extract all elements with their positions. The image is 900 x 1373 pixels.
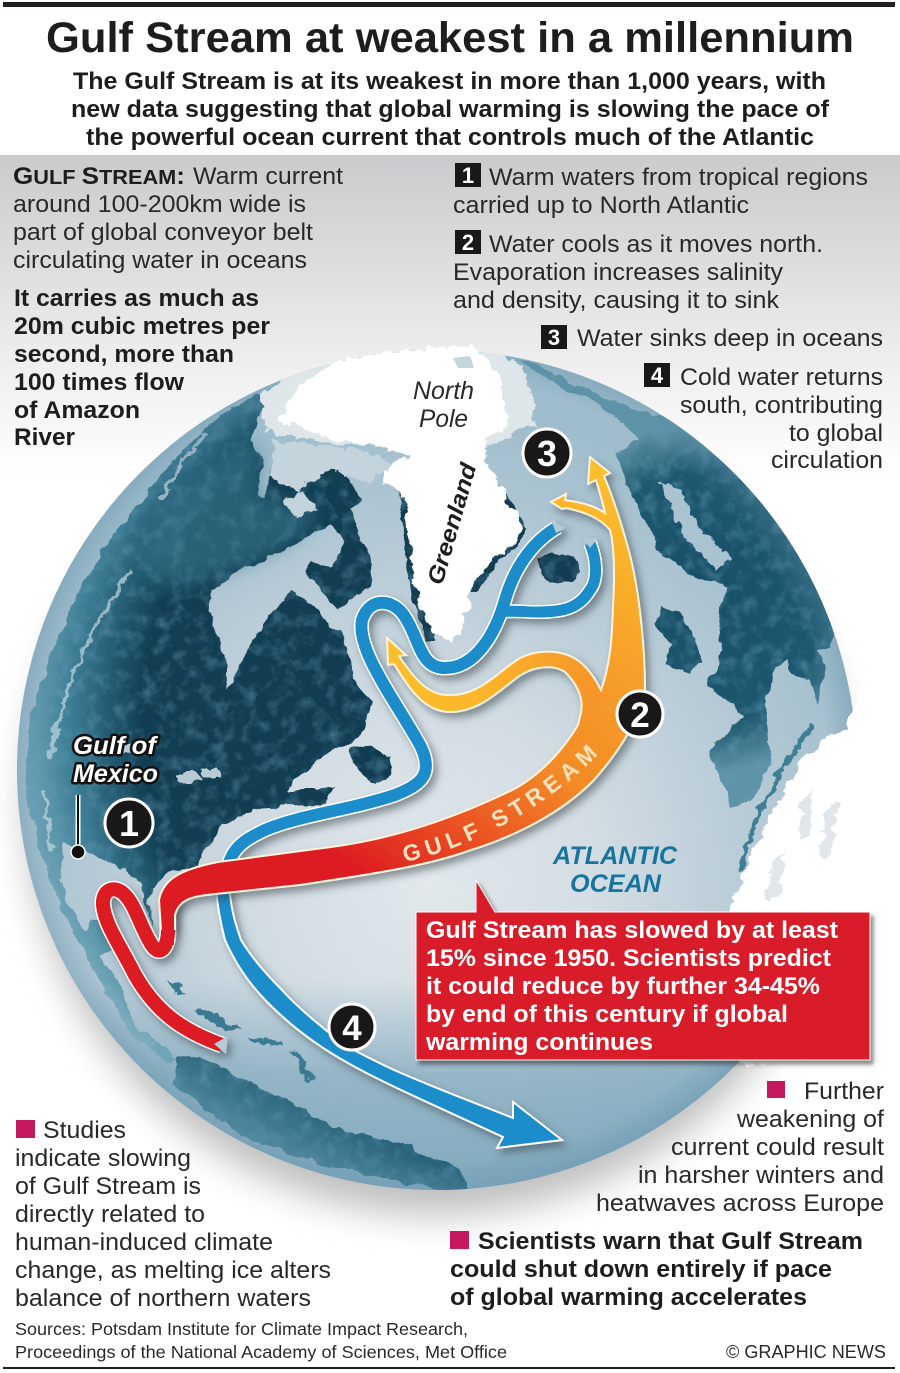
sources: Sources: Potsdam Institute for Climate Impact Research,: [15, 1319, 468, 1339]
badge 1: 1: [119, 803, 139, 844]
step 4: Cold water returns: [680, 364, 883, 391]
badge 3: 3: [537, 433, 557, 474]
pale sea ice halo: [262, 342, 534, 445]
text: flow comparison: It carries as much as: [14, 285, 259, 312]
land: northern Canada lighter tone: [140, 440, 315, 590]
text: further weakening: [596, 1078, 884, 1217]
badge 2: 2: [630, 696, 650, 735]
step 4: 4: [651, 363, 664, 388]
arctic ice and Greenland: [278, 346, 522, 643]
text: further weakening: in harsher winters and: [638, 1162, 884, 1189]
step 4: circulation: [771, 447, 883, 474]
label: Atlantic Ocean: OCEAN: [570, 870, 662, 898]
land: Arctic archipelago: [262, 458, 362, 548]
step 4: south, contributing: [680, 392, 883, 419]
Africa: north coast: [742, 725, 813, 872]
text: studies: directly related to: [15, 1201, 205, 1228]
subtitle: new data suggesting that global warming is slowing the pace of: [71, 96, 830, 123]
ocean: [17, 350, 857, 1190]
label: Greenland: Greenland: [422, 459, 482, 587]
step 4: [644, 363, 883, 474]
text: Gulf Stream definition: part of global conveyor belt: [13, 219, 313, 246]
step 2: Water cools as it moves north.: [489, 231, 823, 258]
text: Gulf Stream definition: around 100-200km wide is: [13, 191, 306, 218]
land masses: [28, 356, 838, 1195]
text: flow comparison: 20m cubic metres per: [14, 313, 270, 340]
step 2: [453, 230, 823, 314]
text: Gulf Stream definition: GULF STREAM :: [13, 163, 185, 190]
bottom rule: [3, 1367, 895, 1369]
islands: Caribbean: [167, 980, 314, 1080]
text: studies: human-induced climate: [15, 1229, 273, 1256]
text: studies: balance of northern waters: [15, 1285, 311, 1312]
ocean: darker southern water: [17, 350, 857, 1190]
step 3: 3: [548, 325, 560, 350]
text: Gulf Stream definition: Warm current: [193, 163, 343, 190]
land: pale Rocky Mountain streak: [45, 435, 205, 850]
globe shadow: [27, 395, 847, 1215]
step 2: Evaporation increases salinity: [453, 259, 784, 286]
step 1: 1: [462, 163, 474, 188]
sheer white right edge of the globe: [858, 690, 900, 910]
land: Newfoundland: [348, 745, 392, 785]
credit: © GRAPHIC NEWS: [726, 1342, 886, 1362]
text: flow comparison: of Amazon: [14, 397, 140, 424]
land: Greenland west coast: [398, 490, 436, 640]
label: North Pole: Pole: [419, 405, 468, 433]
label: Atlantic Ocean: ATLANTIC: [552, 842, 678, 870]
panel: grey background: [0, 155, 900, 480]
step 1: Warm waters from tropical regions: [489, 164, 868, 191]
text: further weakening: heatwaves across Europe: [596, 1190, 884, 1217]
globe: [17, 342, 900, 1195]
badge 3: [523, 429, 571, 477]
text: studies: indicate slowing: [15, 1145, 191, 1172]
label: Gulf of Mexico: Mexico: [73, 760, 158, 788]
sea: patch in the ice: [453, 356, 474, 368]
label: Atlantic Ocean: [552, 842, 678, 898]
pin: Gulf of Mexico: [71, 795, 85, 859]
callout: slowdown: warming continues: [425, 1029, 653, 1056]
text: Gulf Stream definition: [13, 163, 343, 274]
callout: slowdown: by end of this century if global: [426, 1001, 788, 1028]
label: North Pole: North: [413, 377, 474, 405]
limb shading: [17, 350, 857, 1190]
sources: Proceedings of the National Academy of Sciences, Met Office: [15, 1342, 507, 1362]
callout: slowdown: [416, 880, 870, 1060]
label: Gulf of Mexico: Gulf of: [73, 732, 159, 760]
ocean currents: [94, 455, 656, 1158]
current: red tail through the Gulf of Mexico: [103, 885, 228, 1054]
ice: mottled Canadian Arctic: [272, 440, 395, 520]
text: shutdown warning: of global warming accelerates: [450, 1284, 807, 1311]
text: further weakening: current could result: [671, 1134, 884, 1161]
subtitle: the powerful ocean current that controls much of the Atlantic: [86, 124, 814, 151]
sources: [15, 1319, 507, 1362]
label: Gulf of Mexico: [73, 732, 159, 788]
text: shutdown warning: Scientists warn that Gulf Stream: [478, 1228, 863, 1255]
text: shutdown warning: could shut down entirely if pace: [450, 1256, 832, 1283]
land: Europe: [516, 356, 838, 808]
step 1: carried up to North Atlantic: [453, 192, 749, 219]
callout: slowdown: Gulf Stream has slowed by at least: [426, 917, 838, 944]
text: shutdown warning: [450, 1228, 863, 1311]
top rule: [3, 2, 895, 7]
text: Gulf Stream definition: circulating water in oceans: [13, 247, 307, 274]
badge 1: [105, 799, 153, 847]
subtitle: [71, 68, 830, 151]
title: Gulf Stream at weakest in a millennium: [46, 14, 854, 62]
text: flow comparison: 100 times flow: [14, 369, 185, 396]
callout: slowdown: 15% since 1950. Scientists predict: [426, 945, 831, 972]
label: North Pole: [413, 377, 474, 433]
callout: slowdown: it could reduce by further 34-45%: [426, 973, 820, 1000]
Africa: pale desert: [705, 690, 900, 1065]
badge 4: [329, 1004, 375, 1050]
current: Gulf Stream main ribbon with branches: [159, 457, 645, 930]
badge 2: [617, 691, 663, 737]
subtitle: The Gulf Stream is at its weakest in more than 1,000 years, with: [73, 68, 826, 95]
land: Greenland east coast: [470, 485, 526, 590]
badge 4: 4: [342, 1009, 362, 1048]
text: flow comparison: [14, 285, 270, 451]
text: further weakening: Further: [804, 1078, 884, 1105]
land: North America: [28, 388, 373, 1064]
label: Gulf Stream on ribbon: GULF STREAM: [403, 744, 598, 861]
text: studies: of Gulf Stream is: [15, 1173, 201, 1200]
current: cold water return, blue arrow: [215, 520, 598, 1148]
step 4: to global: [789, 420, 883, 447]
step 3: Water sinks deep in oceans: [577, 325, 883, 352]
Africa: desert mottling: [765, 790, 838, 905]
text: flow comparison: second, more than: [14, 341, 234, 368]
land: South America: [172, 1055, 470, 1195]
land: Baffin Island: [305, 490, 373, 610]
sea: Baltic: [661, 483, 730, 570]
step 2: and density, causing it to sink: [453, 287, 780, 314]
lakes: Great Lakes: [120, 740, 222, 783]
text: studies: Studies: [43, 1117, 126, 1144]
text: further weakening: weakening of: [736, 1106, 884, 1133]
text: studies: change, as melting ice alters: [15, 1257, 331, 1284]
land: Iceland: [536, 553, 580, 582]
step 1: [453, 163, 868, 219]
step 2: 2: [462, 230, 474, 255]
text: flow comparison: River: [14, 424, 75, 451]
text: studies: [15, 1117, 331, 1312]
